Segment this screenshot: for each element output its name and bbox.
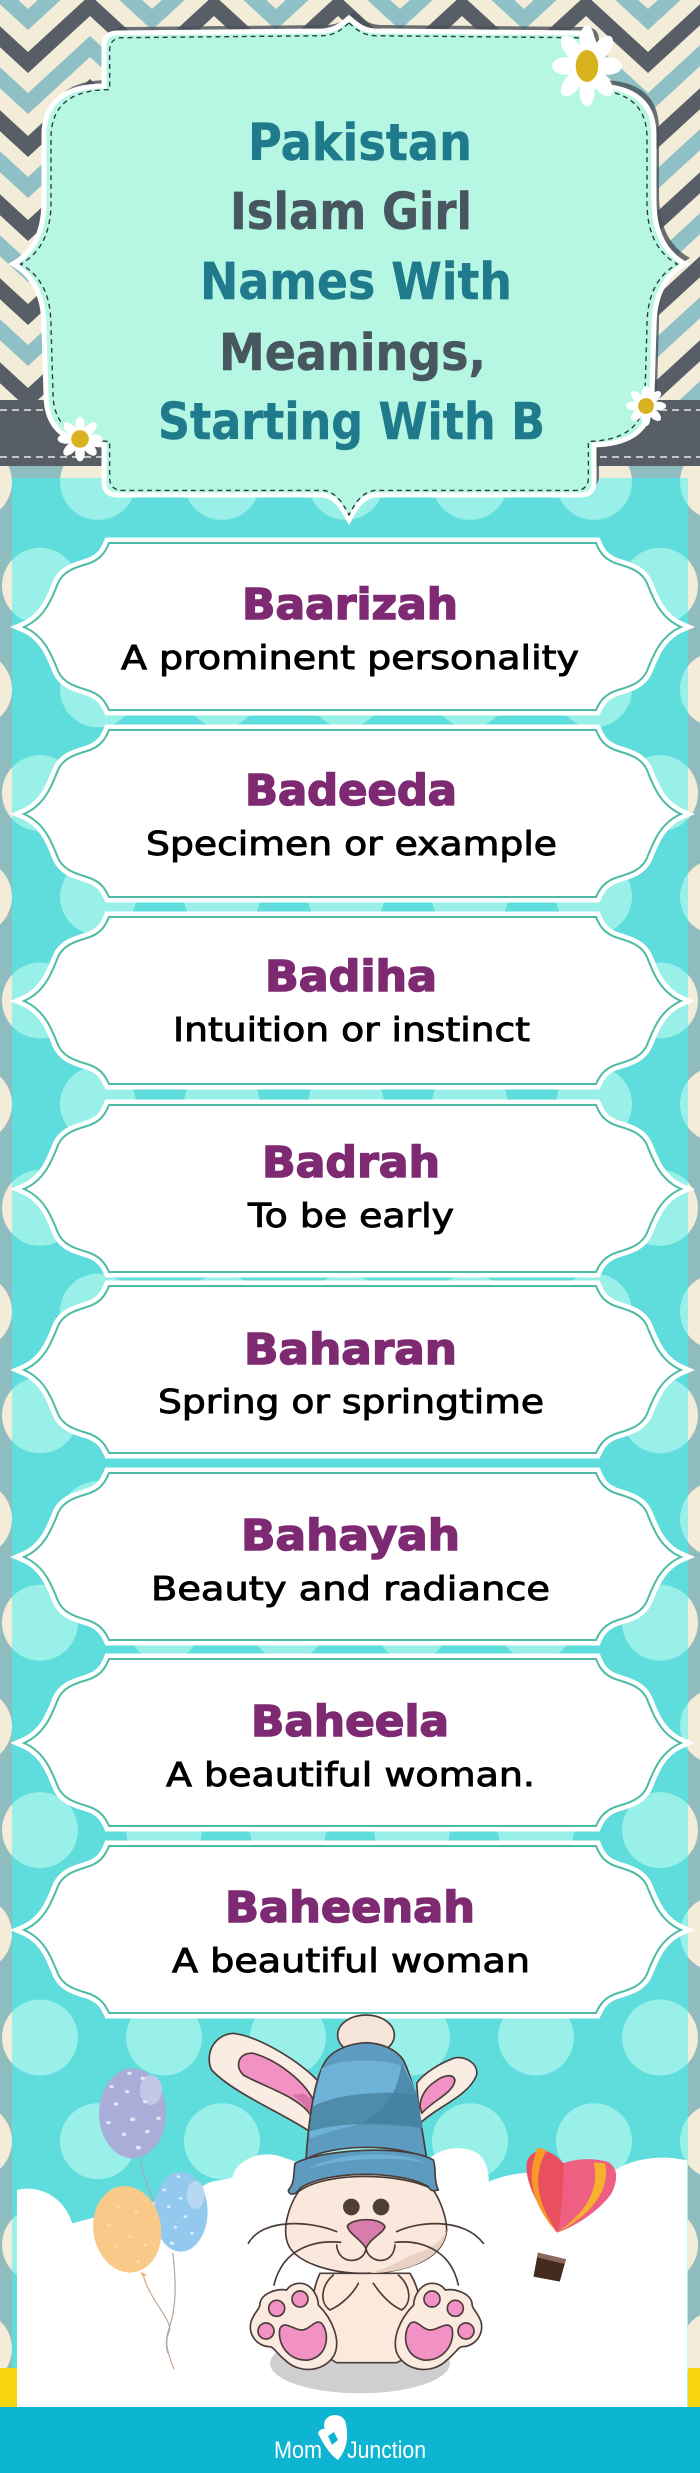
MomJunction logo: Junction <box>347 2437 426 2464</box>
title: Meanings, <box>219 324 486 383</box>
card: Badeeda <box>24 730 681 897</box>
card: Baheenah: Baheenah <box>225 1883 475 1933</box>
footer bar <box>0 2407 700 2473</box>
hot air balloon <box>527 2147 616 2282</box>
icon: small daisy left <box>58 417 102 461</box>
MomJunction logo <box>274 2415 426 2464</box>
card: Baheela <box>24 1659 681 1826</box>
card: Baheela: A beautiful woman. <box>166 1755 535 1794</box>
card: Bahayah <box>24 1473 681 1640</box>
card: Badrah: To be early <box>247 1196 454 1235</box>
illustration: bunny with hat <box>209 2015 483 2393</box>
icon: small daisy right <box>626 386 666 426</box>
card: Baheela: Baheela <box>251 1697 449 1747</box>
title <box>158 114 545 452</box>
card: Badiha: Badiha <box>265 952 437 1002</box>
card: Baarizah: Baarizah <box>242 580 458 630</box>
card: Badiha <box>24 917 681 1084</box>
MomJunction logo: Mom <box>274 2437 322 2464</box>
card: Baharan <box>24 1286 681 1453</box>
card: Badeeda: Badeeda <box>245 766 457 816</box>
white clouds <box>17 2148 687 2407</box>
card: Bahayah: Bahayah <box>241 1511 460 1561</box>
card: Baharan: Baharan <box>244 1325 457 1375</box>
background: chevron pattern <box>0 0 700 402</box>
card: Badeeda: Specimen or example <box>146 824 557 863</box>
title: Pakistan <box>248 114 472 173</box>
card: Baheenah: A beautiful woman <box>172 1941 530 1980</box>
card: Baheenah <box>24 1846 681 2013</box>
card: Baarizah <box>24 543 681 710</box>
title: Islam Girl <box>230 183 472 242</box>
title plaque <box>13 12 690 520</box>
card: Baarizah: A prominent personality <box>121 638 579 677</box>
title: Names With <box>200 253 512 312</box>
grey stitched band <box>0 400 700 466</box>
card: Badrah: Badrah <box>262 1138 440 1188</box>
title: Starting With B <box>158 393 545 452</box>
card: Badrah <box>24 1105 681 1272</box>
card: Bahayah: Beauty and radiance <box>151 1569 550 1608</box>
background: teal polka-dot panel <box>12 478 688 2407</box>
card: Badiha: Intuition or instinct <box>173 1010 530 1049</box>
card: Baharan: Spring or springtime <box>158 1382 544 1421</box>
yellow side accents <box>0 2368 700 2407</box>
balloons <box>89 2068 208 2369</box>
icon: large daisy <box>552 25 622 107</box>
